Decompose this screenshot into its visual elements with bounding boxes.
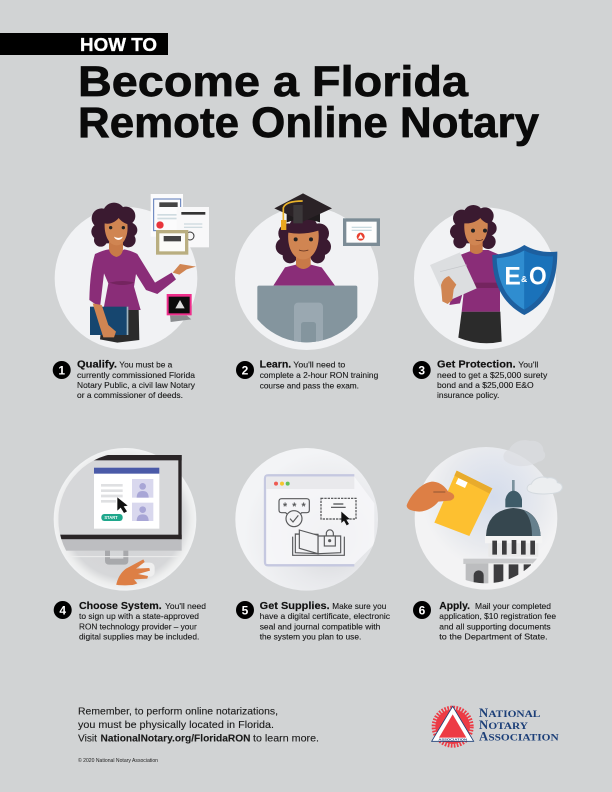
- step 2 text: complete a 2-hour RON training: [260, 370, 379, 380]
- icon: seal: ASSOCIATION: [438, 738, 467, 742]
- step 5 text: Get Supplies.: [260, 601, 330, 612]
- logo wordmark: A: [479, 729, 489, 743]
- step 1 text: [53, 360, 196, 400]
- step 2 text: Learn.: [260, 360, 291, 371]
- step 1 text: Qualify.: [77, 360, 117, 371]
- icon: woman presenting: [89, 203, 196, 343]
- title: Remote Online Notary: [78, 99, 539, 147]
- icon: woman holding paper: [449, 205, 502, 343]
- icon: E&O shield: O: [529, 263, 547, 290]
- step 3 text: You'll: [518, 360, 538, 370]
- icon: capitol building: [463, 480, 541, 584]
- panel: get supplies illustration: [235, 448, 378, 591]
- step 6 text: [413, 601, 556, 641]
- logo: national notary association: [432, 706, 559, 746]
- screen window: [94, 468, 159, 529]
- step 4 text: digital supplies may be included.: [79, 631, 199, 641]
- step 4 text: RON technology provider – your: [79, 621, 197, 631]
- icon: notary stamp: [167, 294, 192, 322]
- icon: graduation cap: [274, 193, 332, 230]
- footer note: [78, 706, 319, 744]
- step 3 text: insurance policy.: [437, 390, 499, 400]
- step 5 text: Make sure you: [332, 601, 387, 611]
- step 5 text: seal and journal compatible with: [260, 621, 381, 631]
- header tag: how to: [0, 33, 168, 55]
- step 6 text: application, $10 registration fee: [439, 611, 556, 621]
- step 4 text: You'll need: [165, 601, 206, 611]
- icon: computer monitor back: [257, 286, 358, 342]
- icon: locked journal: [293, 530, 344, 555]
- title: Become a Florida: [78, 58, 469, 106]
- icon: hand on mouse: [116, 559, 155, 586]
- logo wordmark: N: [479, 706, 488, 720]
- footer note: to learn more.: [253, 732, 319, 744]
- panel: get protection illustration: [414, 205, 557, 349]
- step 6 text: Apply.: [439, 601, 470, 612]
- icon: cursor arrow: [341, 512, 350, 525]
- logo wordmark: [479, 706, 559, 743]
- step 6 text: 6: [419, 604, 426, 618]
- panel: learn illustration: [235, 193, 380, 350]
- step 6 text: Mail your completed: [475, 601, 551, 611]
- step 3 text: 3: [418, 364, 425, 378]
- footer note: Remember, to perform online notarizations,: [78, 706, 278, 718]
- logo wordmark: N: [479, 718, 488, 732]
- panel: apply illustration: [407, 440, 562, 590]
- step 5 text: have a digital certificate, electronic: [260, 611, 391, 621]
- step 2 text: course and pass the exam.: [260, 380, 359, 390]
- step 5 text: 5: [242, 604, 249, 618]
- step 3 text: need to get a $25,000 surety: [437, 370, 548, 380]
- icon: E&O shield: &: [521, 274, 527, 284]
- step 5 text: [236, 601, 391, 641]
- panel: choose system illustration: [53, 448, 196, 591]
- icon: desktop computer: [53, 455, 182, 565]
- step 6 text: and all supporting documents: [439, 621, 551, 631]
- icon: certificates: [151, 194, 209, 255]
- logo wordmark: SSOCIATION: [488, 732, 559, 743]
- step 1 text: You must be a: [119, 360, 173, 370]
- footer note: NationalNotary.org/FloridaRON: [100, 732, 250, 744]
- step 4 text: 4: [59, 604, 66, 618]
- icon: password check: [279, 499, 309, 527]
- browser window: [265, 475, 374, 565]
- panel: qualify illustration: [55, 194, 209, 350]
- step 6 text: to the Department of State.: [439, 631, 548, 641]
- step 3 text: Get Protection.: [437, 360, 516, 371]
- icon: clouds: [503, 440, 562, 494]
- title: [78, 58, 539, 147]
- step 2 text: [236, 360, 379, 390]
- header tag: how to: HOW TO: [80, 35, 157, 55]
- step 3 text: bond and a $25,000 E&O: [437, 380, 534, 390]
- icon: E&O shield: E: [504, 263, 521, 290]
- step 4 text: Choose System.: [79, 601, 162, 612]
- step 4 text: to sign up with a state-approved: [79, 611, 199, 621]
- step 4 text: [54, 601, 206, 641]
- step 1 text: or a commissioner of deeds.: [77, 390, 183, 400]
- logo wordmark: OTARY: [488, 721, 528, 732]
- step 5 text: the system you plan to use.: [260, 631, 361, 641]
- footer note: you must be physically located in Florida.: [78, 719, 274, 731]
- icon: digital certificate: [321, 498, 356, 519]
- icon: E&O shield: [492, 245, 557, 315]
- step 1 text: Notary Public, a civil law Notary: [77, 380, 196, 390]
- icon: hand with envelope: [407, 471, 492, 536]
- icon: blue folder: [90, 303, 128, 337]
- icon: password check: ***: [283, 501, 307, 513]
- screen window: START: [104, 515, 118, 520]
- step 2 text: You'll need to: [293, 360, 346, 370]
- logo wordmark: ATIONAL: [488, 709, 541, 720]
- footer note: Visit: [78, 732, 97, 744]
- icon: paper document: [430, 252, 477, 304]
- icon: cursor arrow: [117, 497, 128, 513]
- step 3 text: [413, 360, 548, 400]
- icon: graduate: [273, 215, 335, 286]
- copyright: © 2020 National Notary Association: [78, 757, 158, 764]
- step 2 text: 2: [242, 364, 249, 378]
- icon: diploma: [343, 218, 380, 246]
- step 1 text: 1: [58, 364, 65, 378]
- step 1 text: currently commissioned Florida: [77, 370, 195, 380]
